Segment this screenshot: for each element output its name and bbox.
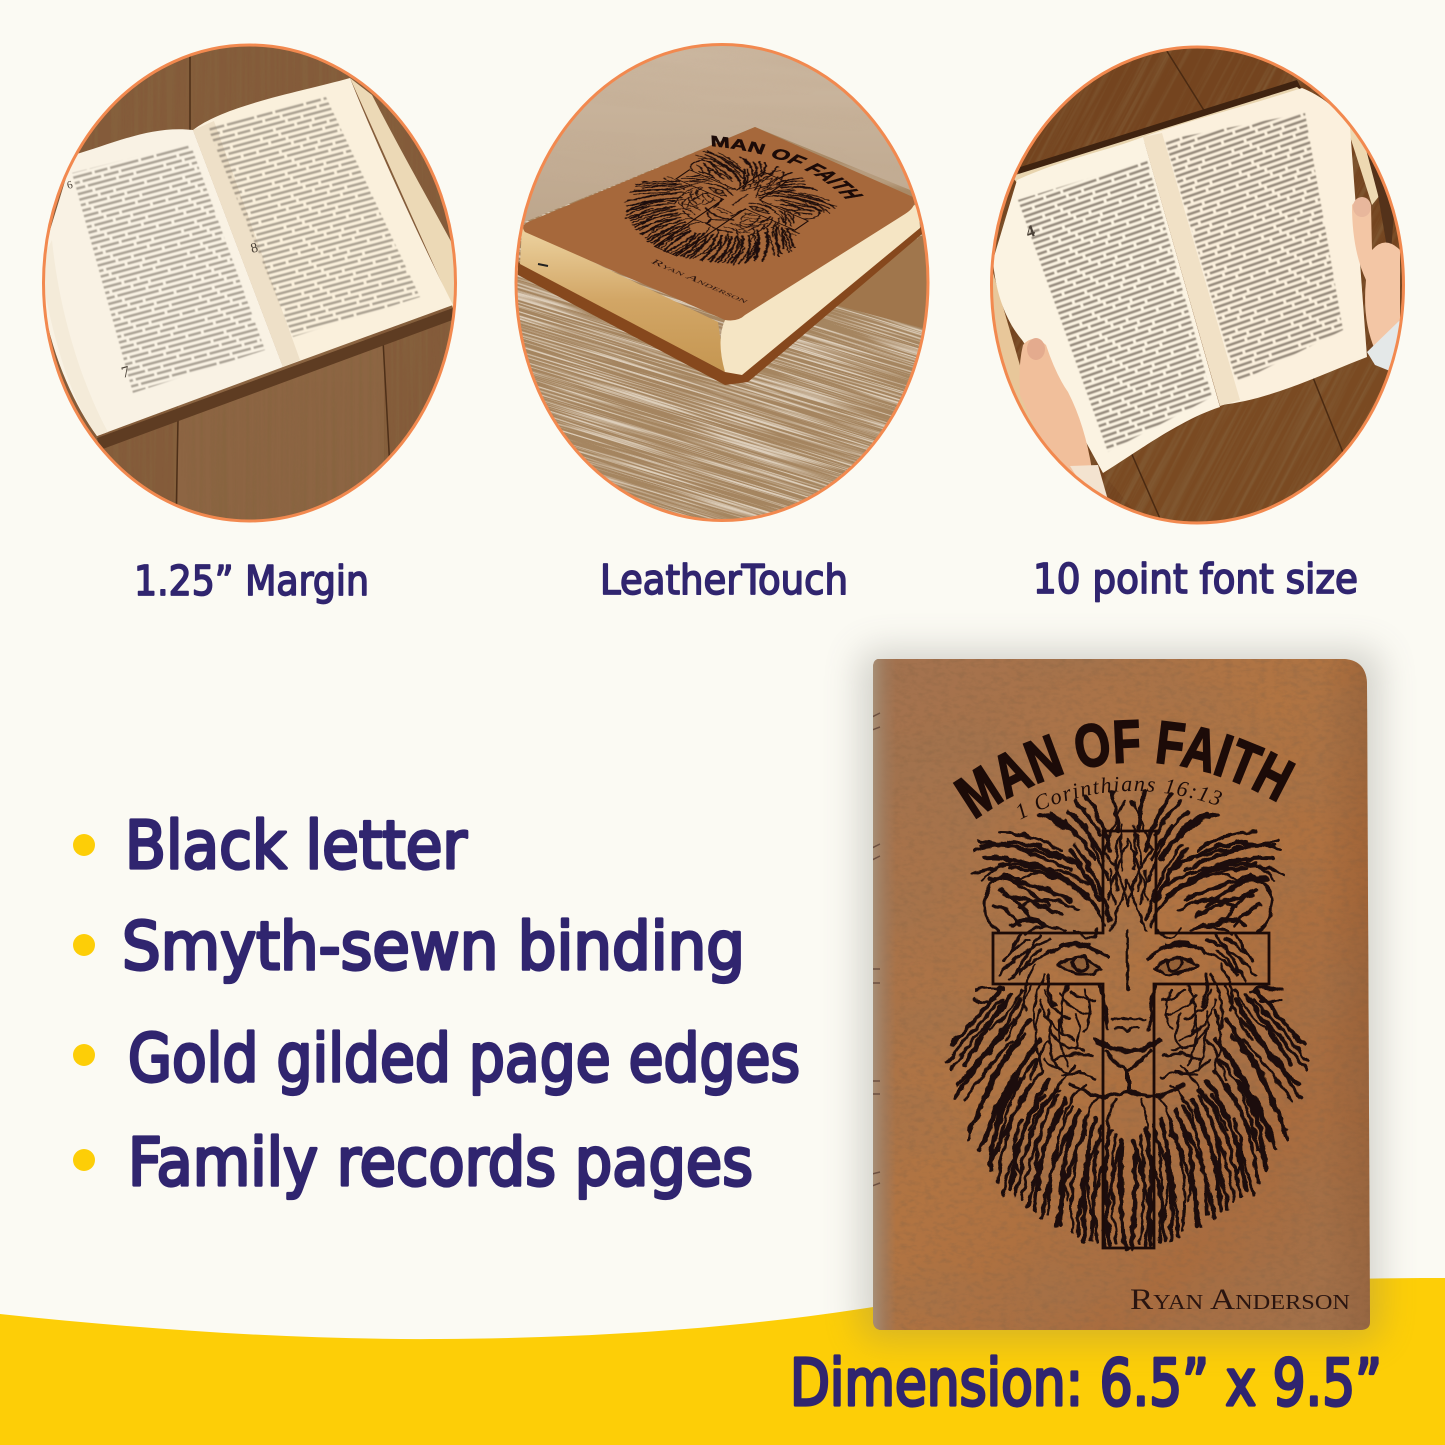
cover title: MAN OF FAITH [952,719,1296,820]
panel: leather bible photo [518,46,926,519]
verse reference: 1 Corinthians 16:13 [1017,776,1222,820]
page stack right [1350,128,1378,205]
gilded page block [520,228,725,372]
caption: font size: 10 point font size [1033,555,1358,603]
bullet 3 [73,1044,95,1066]
yellow wave band [0,1278,1445,1445]
panel: open bible photo, margin [40,40,462,530]
engraved name: Ryan Anderson [648,258,752,305]
engraving [624,135,864,303]
feature: family records: Family records pages [128,1124,753,1201]
page numeral 6: 6 [66,179,75,192]
right page [1143,88,1367,405]
personalised name: Ryan Anderson [1130,1283,1350,1316]
book shadow [860,650,1380,1340]
feature: black letter: Black letter [125,807,468,884]
circle 1 orange border [44,45,456,521]
feature list [73,807,800,1201]
page numeral 4: 4 [1023,221,1038,242]
bullet 1 [73,834,95,856]
bullet 4 [73,1149,95,1171]
circle 2 orange border [516,44,928,520]
lion and cross engraving [948,792,1308,1248]
circle 3 orange border [992,47,1404,523]
right hand [1352,198,1400,350]
page stack left [993,272,1036,431]
left hand [1019,339,1092,480]
left page [993,137,1220,473]
back cover [518,226,922,385]
right sleeve [1367,320,1400,375]
panel: hands holding open bible photo [993,48,1402,522]
feature: binding: Smyth-sewn binding [122,908,745,985]
leather cover [523,127,914,320]
leather bible cover [873,659,1370,1330]
feature: page edges: Gold gilded page edges [128,1020,800,1097]
page numeral 8: 8 [249,241,260,257]
caption: margin: 1.25” Margin [134,557,369,605]
bullet 2 [73,934,95,956]
page numeral 7: 7 [120,363,132,382]
left sleeve [1070,465,1108,500]
engraved title: MAN OF FAITH [711,135,864,199]
caption: cover material: LeatherTouch [600,556,848,604]
